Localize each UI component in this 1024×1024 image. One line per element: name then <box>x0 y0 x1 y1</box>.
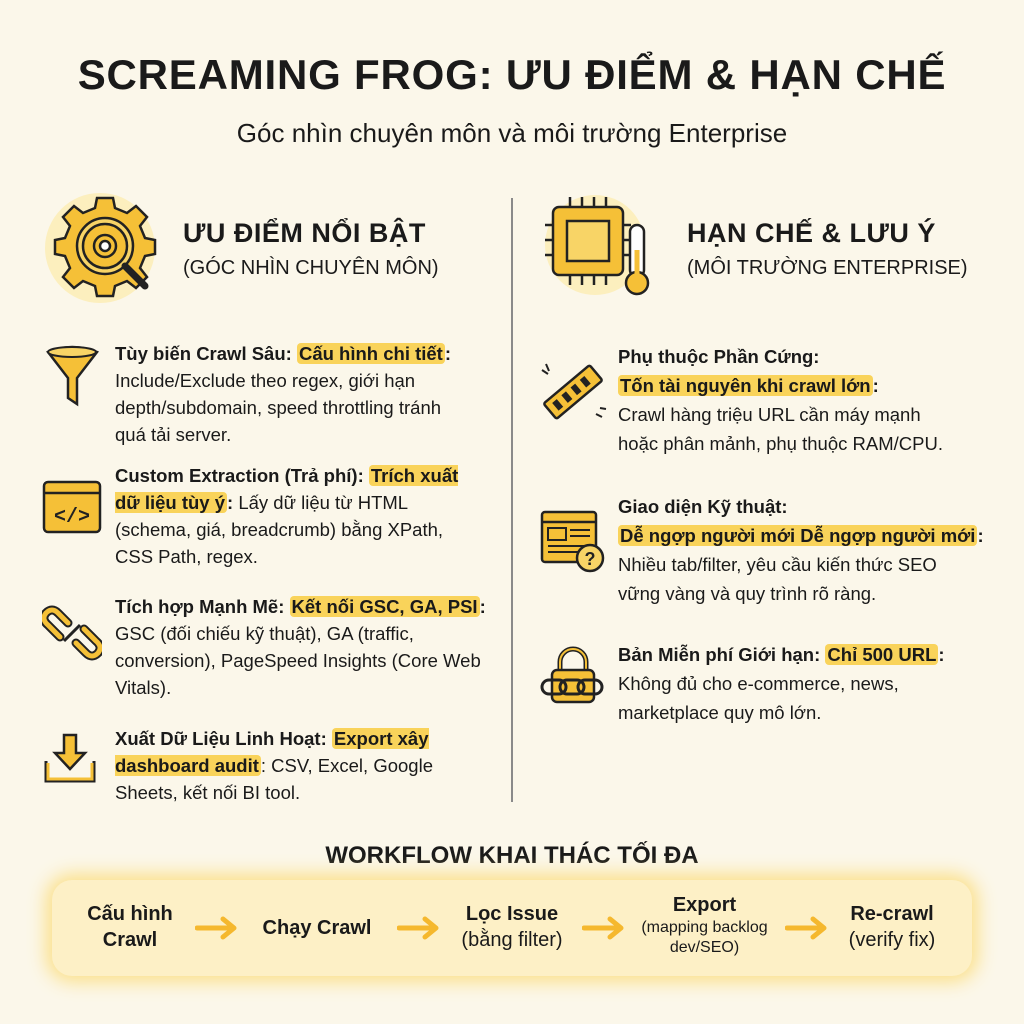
step 3: (bằng filter) <box>461 929 563 951</box>
item: technical interface <box>540 496 984 604</box>
icon: cpu thermometer <box>545 195 650 296</box>
icon: RAM stick <box>542 364 606 420</box>
panel: advantages <box>42 193 486 803</box>
item: data export: Xuất Dữ Liệu Linh Hoạt: Export xây dashboard audit: CSV, Excel, Google Sheets, kết nối BI tool. <box>115 728 433 803</box>
arrow 1 <box>195 916 236 940</box>
step 4: dev/SEO) <box>670 939 739 956</box>
step 4: (mapping backlog <box>641 919 768 936</box>
icon: window question: ? <box>584 549 596 569</box>
item: custom extraction: Custom Extraction (Trả phí): Trích xuất dữ liệu tùy ý: Lấy dữ liệu từ HTML (schema, giá, breadcrumb) bằng XPath, <box>115 465 458 540</box>
panel: limitations <box>540 195 984 723</box>
heading: advantages: (GÓC NHÌN CHUYÊN MÔN) <box>183 257 439 279</box>
step 3 <box>461 903 563 951</box>
icon: padlock chain <box>540 646 604 704</box>
item: technical interface: vững vàng và quy trình rõ ràng. <box>618 583 876 604</box>
heading: limitations <box>687 218 968 279</box>
item: hardware <box>542 346 943 454</box>
arrow 4 <box>785 916 826 940</box>
item: technical interface: Dễ ngợp người mới Dễ ngợp người mới: Nhiều tab/filter, yêu cầu kiến thức SEO <box>618 525 984 575</box>
item: free version limit: Bản Miễn phí Giới hạn: Chỉ 500 URL: Không đủ cho e-commerce, news, marketplace quy mô lớn. <box>618 644 945 723</box>
icon: gear magnifier <box>45 193 156 303</box>
heading: advantages: ƯU ĐIỂM NỔI BẬT <box>183 218 426 248</box>
step 1: Cấu hình <box>87 903 173 925</box>
item: technical interface: Giao diện Kỹ thuật: <box>618 496 788 517</box>
heading: limitations: HẠN CHẾ & LƯU Ý <box>687 218 936 248</box>
heading: advantages <box>183 218 439 279</box>
item: integrations: Tích hợp Mạnh Mẽ: Kết nối GSC, GA, PSI: GSC (đối chiếu kỹ thuật), GA (traffic, conversion), PageSpeed Insights (Core Web Vitals). <box>115 596 486 698</box>
item: hardware: Crawl hàng triệu URL cần máy mạnh hoặc phân mảnh, phụ thuộc RAM/CPU. <box>618 404 943 454</box>
workflow heading: WORKFLOW KHAI THÁC TỐI ĐA <box>325 842 699 869</box>
icon: window question <box>540 510 604 572</box>
item: custom extraction: CSS Path, regex. <box>115 546 258 567</box>
item: crawl customization: Tùy biến Crawl Sâu: Cấu hình chi tiết: Include/Exclude theo regex, giới hạn depth/subdomain, speed throttling tránh quá tải server. <box>115 343 451 445</box>
title: SCREAMING FROG: ƯU ĐIỂM & HẠN CHẾ <box>78 51 946 98</box>
arrow 2 <box>397 916 438 940</box>
item: custom extraction <box>42 465 458 567</box>
icon: code window: </> <box>54 506 90 529</box>
divider <box>511 198 513 802</box>
item: hardware: Tốn tài nguyên khi crawl lớn: <box>620 375 879 396</box>
step 5: Re-crawl <box>850 903 934 925</box>
step 3: Lọc Issue <box>466 903 558 925</box>
step 1 <box>87 903 173 951</box>
step 5: (verify fix) <box>849 929 935 951</box>
item: hardware: Phụ thuộc Phần Cứng: <box>618 346 819 367</box>
step 4: Export <box>673 894 736 916</box>
step 4 <box>641 894 768 956</box>
workflow panel <box>52 880 972 976</box>
arrow 3 <box>582 916 624 940</box>
step 5 <box>849 903 935 951</box>
heading: limitations: (MÔI TRƯỜNG ENTERPRISE) <box>687 257 968 279</box>
step 2: Chạy Crawl <box>263 917 371 939</box>
step 1: Crawl <box>103 929 157 951</box>
icon: chain link <box>42 606 102 660</box>
subtitle: Góc nhìn chuyên môn và môi trường Enterprise <box>237 118 787 148</box>
icon: funnel <box>46 346 99 406</box>
icon: code window <box>42 480 102 534</box>
icon: download <box>44 734 96 782</box>
